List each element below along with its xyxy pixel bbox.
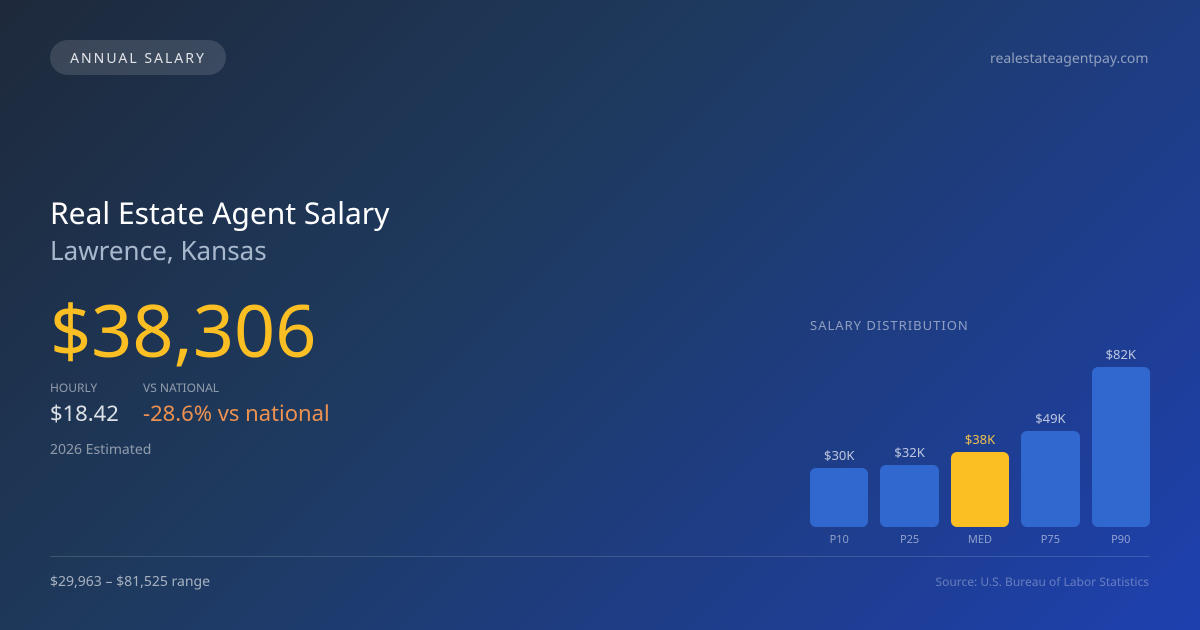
source note: Source: U.S. Bureau of Labor Statistics (936, 573, 1149, 590)
bar P25: P25 (900, 532, 919, 547)
bar P90: $82K (1106, 345, 1136, 363)
bar P90 (1092, 345, 1150, 547)
bar P75: P75 (1041, 532, 1060, 547)
bar P10: $30K (824, 446, 854, 464)
stat: hourly (50, 379, 119, 428)
headline salary: $38,306 (50, 281, 316, 379)
stat: versus national (143, 379, 330, 428)
salary range: $29,963 – $81,525 range (50, 572, 210, 591)
bar P75 (1021, 409, 1080, 547)
bar P90: P90 (1111, 532, 1130, 547)
badge: annual salary (50, 40, 226, 75)
footer divider (50, 556, 1150, 557)
subtitle: location: Lawrence, Kansas (50, 232, 267, 268)
bar median: $38K (965, 430, 995, 448)
bar P75: $49K (1035, 409, 1066, 427)
badge: annual salary: ANNUAL SALARY (70, 49, 206, 68)
versus national label: VS NATIONAL (143, 379, 219, 396)
bar P10: P10 (830, 532, 849, 547)
title: Real Estate Agent Salary (50, 192, 389, 233)
bar median: MED (968, 532, 992, 547)
bar P25 (880, 443, 939, 547)
estimate note: 2026 Estimated (50, 440, 151, 459)
bar P25: $32K (894, 443, 925, 461)
bar P10 (810, 446, 868, 547)
bar median (951, 430, 1009, 547)
hourly label: HOURLY (50, 379, 97, 396)
chart heading: salary distribution: SALARY DISTRIBUTION (810, 316, 969, 334)
versus national value: -28.6% vs national (143, 398, 330, 428)
hourly value: $18.42 (50, 398, 119, 428)
site domain: realestateagentpay.com (990, 49, 1148, 68)
